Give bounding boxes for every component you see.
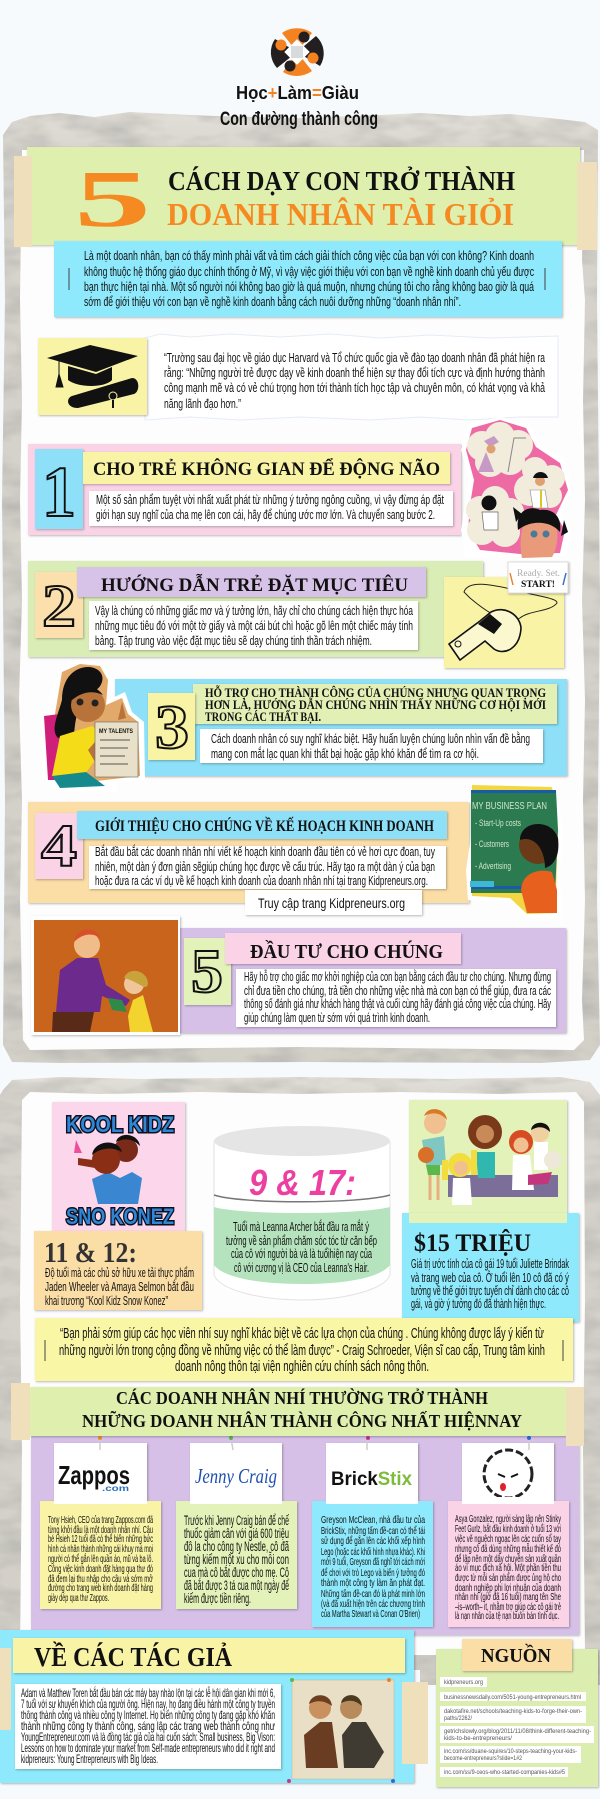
title banner bbox=[14, 147, 597, 250]
panel: 15 million: $15 TRIỆU bbox=[414, 1229, 531, 1257]
card text: Jenny Craig: đô la cho công ty Nestle, cô đã bbox=[184, 1539, 289, 1554]
cylinder text: Tuổi mà Leanna Archer bắt đầu ra mắt ý bbox=[233, 1219, 369, 1234]
sources heading bbox=[462, 1639, 572, 1671]
tape right bbox=[577, 162, 597, 250]
brand name: Học+Làm=Giàu bbox=[236, 83, 359, 103]
step 4 number: 4 bbox=[41, 813, 77, 879]
tape scrap bbox=[402, 1682, 428, 1764]
logo card: Jenny Craig bbox=[190, 1436, 282, 1507]
heading banner: young entrepreneurs: CÁC DOANH NHÂN NHÍ THƯỜNG TRỞ THÀNH bbox=[116, 1388, 488, 1408]
panel: 11 and 12 bbox=[34, 1231, 202, 1310]
step 2 number: 2 bbox=[42, 573, 76, 639]
card text: Jenny Craig: đã bắt được 3 tá cua một ngày để bbox=[184, 1578, 289, 1593]
card text: Zappos: từng khởi đầu là một doanh nhân nhí. Cậu bbox=[48, 1524, 153, 1536]
cylinder text: cô với cương vị là CEO của Leanna's Hair. bbox=[234, 1261, 369, 1275]
illustration: whistle bbox=[444, 577, 564, 668]
authors text bbox=[15, 1684, 281, 1769]
logo card: Zappos bbox=[54, 1436, 147, 1507]
tape left bbox=[14, 156, 32, 247]
card text: BrickStix: thành một công ty làm ăn phát đạt. bbox=[321, 1577, 425, 1589]
paper sheet 2 inner bbox=[20, 1092, 585, 1655]
panel: Craig Schroeder quote bbox=[35, 1318, 573, 1381]
Kool Kidz wordmark: KOOL KIDZ bbox=[66, 1112, 174, 1137]
illustration: father giving money to son bbox=[31, 916, 180, 1035]
source links: businessnewsdaily.com/5051-young-entrepreneurs.html bbox=[444, 1695, 581, 1701]
panel: young entrepreneurs bbox=[31, 1436, 579, 1635]
panel: 11 and 12: Độ tuổi mà các chủ sở hữu xe tải thực phẩm bbox=[45, 1266, 194, 1280]
sign: ready set start: START! bbox=[521, 579, 555, 589]
panel: Kool Kidz logo bbox=[52, 1102, 185, 1233]
step 4 text bbox=[89, 844, 446, 889]
step 2 text: Vậy là chúng có những giấc mơ và ý tưởng lớn, hãy chỉ cho chúng cách hiện thực hóa bbox=[95, 603, 413, 618]
step 3 heading: TRONG CÁC THẤT BẠI. bbox=[205, 709, 321, 724]
paper sheet 1 inner bbox=[19, 150, 585, 1050]
card text: Jenny Craig: từng kiếm một xu cho mỗi con bbox=[184, 1552, 289, 1567]
authors text: thành những công ty thành công, sáng lập các trang web thành công như bbox=[21, 1719, 275, 1733]
icon: graduation cap and diploma bbox=[38, 338, 147, 415]
illustration: boy at business plan chalkboard: - Start-Up costs bbox=[475, 818, 521, 828]
logo card: BrickStix bbox=[326, 1436, 418, 1507]
logo card: Stinky Feet Gurlz bbox=[462, 1436, 554, 1507]
link button bbox=[245, 890, 422, 915]
authors text: 7 tuổi với sự khuyến khích của người ông. Hiện nay, họ đang điều hành một công ty truyền bbox=[21, 1697, 275, 1711]
illustration: boy at business plan chalkboard bbox=[466, 782, 563, 918]
title text bbox=[167, 166, 515, 232]
step 3 heading bbox=[193, 684, 557, 724]
card text: BrickStix: sử dụng để gắn lên các khối xếp hình bbox=[321, 1534, 425, 1547]
card text: Zappos: giày dép qua thư Zappos. bbox=[48, 1593, 109, 1604]
card text: Zappos: bé Hsieh 12 tuổi đã có thể biến những bức bbox=[48, 1533, 153, 1545]
panel: 11 and 12: khai trương “Kool Kidz Snow Konez” bbox=[45, 1294, 168, 1308]
card text: Jenny Craig bbox=[176, 1497, 297, 1609]
authors text: Lessons on how to dominate your market from Self-made entrepreneurs who did it right and bbox=[21, 1741, 275, 1755]
Kool Kidz wordmark bbox=[66, 1112, 174, 1229]
step 5 heading: ĐẦU TƯ CHO CHÚNG bbox=[250, 939, 443, 963]
card text: Zappos: Tony Hsieh, CEO của trang Zappos.com đã bbox=[48, 1514, 153, 1526]
cylinder text: tưởng về sản phẩm chăm sóc tóc từ căn bếp bbox=[226, 1234, 377, 1248]
card text: Stinky Feet Gurlz bbox=[448, 1497, 569, 1627]
step 1 number: 1 bbox=[42, 452, 76, 532]
card text: BrickStix: để chơi với trò Lego và biến ý tưởng đó bbox=[321, 1567, 425, 1579]
logo bbox=[271, 28, 324, 76]
step 2 heading bbox=[77, 567, 426, 597]
step 2 text: bảng. Tập trung vào việc đặt mục tiêu sẽ dạy chúng tinh thần trách nhiệm. bbox=[95, 633, 372, 648]
panel: step 1 bbox=[28, 444, 461, 535]
paper sheet 2 bbox=[0, 1077, 600, 1685]
tape left bbox=[0, 1648, 11, 1730]
quote panel: năng lãnh đạo hơn.” bbox=[164, 396, 241, 411]
card text: Jenny Craig: cua mà cô bắt được cho mẹ. Cô bbox=[184, 1565, 289, 1580]
card text: BrickStix: (và đã xuất hiện trên các chương trình bbox=[321, 1598, 425, 1610]
step 1 heading: CHO TRẺ KHÔNG GIAN ĐỂ ĐỘNG NÃO bbox=[93, 458, 440, 480]
step 2 number bbox=[35, 572, 83, 639]
step 4 heading: GIỚI THIỆU CHO CHÚNG VỀ KẾ HOẠCH KINH DOANH bbox=[95, 817, 434, 835]
panel: cylinder 9 and 17 bbox=[214, 1126, 390, 1300]
authors text: thông thành công và nhiều công ty Internet. Họ biến những công ty đang gặp khó khăn bbox=[21, 1708, 275, 1722]
source links: inc.com/ss/9-ceos-who-started-companies-kids#5 bbox=[444, 1770, 566, 1776]
title text: DOANH NHÂN TÀI GIỎI bbox=[167, 196, 514, 232]
card text: Jenny Craig: Trước khi Jenny Craig bán để chế bbox=[184, 1513, 289, 1528]
card text: Zappos: đường cho trang web kinh doanh đặt hàng bbox=[48, 1583, 153, 1594]
heading banner: young entrepreneurs: NHỮNG DOANH NHÂN THÀNH CÔNG NHẤT HIỆNNAY bbox=[82, 1411, 522, 1431]
cylinder text: của cô với người bà và là tuổihiện nay của bbox=[231, 1247, 372, 1261]
step 5 number bbox=[184, 938, 231, 1006]
sign: ready set start: Ready. Set. bbox=[517, 569, 560, 579]
card text: Zappos: người có thể gắn lên quần áo, mũ và ba lô. bbox=[48, 1552, 153, 1565]
step 5 text: giúp chúng làm quen từ sớm với quá trình kinh doanh. bbox=[244, 1011, 430, 1025]
source links: kids-to-be-entrepreneurs/ bbox=[444, 1736, 512, 1742]
card text: Zappos: hình cá nhân thành những cái khuy mà mọi bbox=[48, 1544, 153, 1555]
illustration: boy at business plan chalkboard: MY BUSINESS PLAN bbox=[472, 801, 547, 812]
panel: 15 million bbox=[402, 1213, 579, 1322]
card text: Jenny Craig: thuốc giảm cân với giá 600 triệu bbox=[184, 1526, 289, 1541]
source links: getrichslowly.org/blog/2011/11/08/think-different-teaching- bbox=[444, 1729, 591, 1735]
card text: Zappos: Công việc kinh doanh đặt hàng qua thư đó bbox=[48, 1564, 153, 1575]
big number 5: 5 bbox=[74, 154, 151, 244]
step 5 text bbox=[236, 969, 556, 1027]
illustration: child dreaming in thought clouds bbox=[461, 417, 572, 558]
step 2 heading: HƯỚNG DẪN TRẺ ĐẶT MỤC TIÊU bbox=[101, 574, 408, 596]
authors heading bbox=[13, 1638, 405, 1673]
step 3 heading: HƠN LÀ, HƯỚNG DẪN CHÚNG NHÌN THẤY NHỮNG CƠ HỘI MỚI bbox=[205, 697, 546, 712]
step 5 number: 5 bbox=[191, 938, 223, 1006]
panel: sources bbox=[436, 1639, 598, 1787]
heading banner: young entrepreneurs bbox=[11, 1383, 584, 1446]
step 1 heading bbox=[83, 452, 450, 484]
panel: Craig Schroeder quote: doanh nông thôn tại viện nghiên cứu chính sách nông thôn. bbox=[175, 1358, 429, 1375]
source links: paths/2262/ bbox=[444, 1716, 472, 1722]
step 3 number: 3 bbox=[155, 694, 189, 762]
link button: Truy cập trang Kidpreneurs.org bbox=[258, 895, 405, 911]
source links bbox=[440, 1677, 594, 1777]
step 1 text bbox=[89, 491, 453, 526]
illustration: girl holding talents list: MY TALENTS bbox=[99, 729, 133, 735]
Kool Kidz wordmark: SNO KONEZ bbox=[66, 1204, 174, 1229]
step 2 text bbox=[89, 601, 418, 650]
intro panel bbox=[54, 241, 562, 317]
step 3 heading: HỖ TRỢ CHO THÀNH CÔNG CỦA CHÚNG NHƯNG QUAN TRỌNG bbox=[205, 685, 546, 700]
logo card: Jenny Craig: Jenny Craig bbox=[195, 1464, 277, 1488]
step 2 text: những mục tiêu đó với một tờ giấy và một cái bút chì hoặc gõ lên một chiếc máy tính bbox=[95, 618, 413, 633]
authors text: YoungEntrepreneur.com và là đồng tác giả của hai cuốn sách: Small business, Big Vison: bbox=[21, 1730, 275, 1744]
illustration: boy at business plan chalkboard: - Advertising bbox=[475, 861, 511, 871]
logo card: BrickStix: BrickStix bbox=[331, 1469, 412, 1490]
illustration: girl holding talents list bbox=[42, 660, 145, 792]
illustration: boy at business plan chalkboard: - Customers bbox=[475, 839, 509, 849]
tagline: Con đường thành công bbox=[220, 109, 378, 130]
source links: dakotafire.net/schools/teaching-kids-to-forge-their-own- bbox=[444, 1709, 582, 1715]
card text: Jenny Craig: kiếm được tiền riêng. bbox=[184, 1591, 251, 1606]
cylinder heading: 9 & 17: bbox=[249, 1162, 356, 1203]
card text: BrickStix: Greyson McClean, nhà đầu tư của bbox=[321, 1514, 425, 1526]
card text: BrickStix: BrickStix, những tấm đề-can có thể tái bbox=[321, 1525, 425, 1537]
step 3 number bbox=[148, 693, 195, 762]
cylinder text bbox=[226, 1219, 377, 1275]
authors text: Adam và Matthew Toren bắt đầu bán các máy bay nhào lộn tại các lễ hội dân gian khi mới 6, bbox=[21, 1685, 275, 1700]
paper sheet 1 bbox=[2, 112, 600, 1063]
step 4 number bbox=[35, 813, 83, 879]
authors heading: VỀ CÁC TÁC GIẢ bbox=[34, 1641, 232, 1672]
step 4 heading bbox=[77, 811, 447, 839]
authors photo bbox=[287, 1678, 395, 1783]
logo card: Zappos: .com bbox=[102, 1484, 129, 1493]
card text: BrickStix: Lego (hoặc các khối hình nhựa khác). Khi bbox=[321, 1546, 425, 1558]
panel: about the authors bbox=[0, 1630, 414, 1783]
sign: ready set start bbox=[508, 562, 568, 593]
step 3 text bbox=[200, 729, 543, 763]
card text: BrickStix: mới 9 tuổi, Greyson đã nghĩ tới cách mới bbox=[321, 1556, 425, 1568]
quote panel bbox=[145, 334, 558, 420]
panel: step 4 bbox=[28, 802, 469, 915]
source links: kidpreneurs.org bbox=[444, 1680, 483, 1686]
panel: illustration of girls bbox=[409, 1100, 567, 1223]
panel: 11 and 12: 11 & 12: bbox=[44, 1237, 137, 1269]
title text: CÁCH DẠY CON TRỞ THÀNH bbox=[168, 166, 515, 196]
card text: BrickStix: của Martha Stewart và Conan O'Brien) bbox=[321, 1608, 420, 1620]
card text: BrickStix bbox=[312, 1497, 433, 1627]
card text: Zappos bbox=[40, 1497, 161, 1609]
logo card: Zappos: Zappos bbox=[58, 1460, 130, 1490]
authors text: kidpreneurs: Young Entrepreneurs with Big Ideas. bbox=[21, 1752, 158, 1766]
panel: step 3 bbox=[115, 679, 567, 776]
source links: inc.com/ss/duane-squires/10-steps-teaching-your-kids- bbox=[444, 1749, 577, 1755]
panel: step 5 bbox=[180, 928, 566, 1033]
card text: Zappos: đã đem lại thu nhập cho cậu và sớm mở bbox=[48, 1573, 153, 1585]
panel: step 2 bbox=[28, 561, 483, 657]
source links: become-entrepreneurs?slide=1#2 bbox=[444, 1756, 523, 1762]
card text: BrickStix: Những tấm đề-can đó là phát minh lớn bbox=[321, 1588, 425, 1600]
panel: 11 and 12: Jaden Wheeler và Amaya Selmon bắt đầu bbox=[45, 1279, 194, 1294]
step 5 heading bbox=[225, 933, 461, 964]
sources heading: NGUỒN bbox=[481, 1643, 552, 1667]
